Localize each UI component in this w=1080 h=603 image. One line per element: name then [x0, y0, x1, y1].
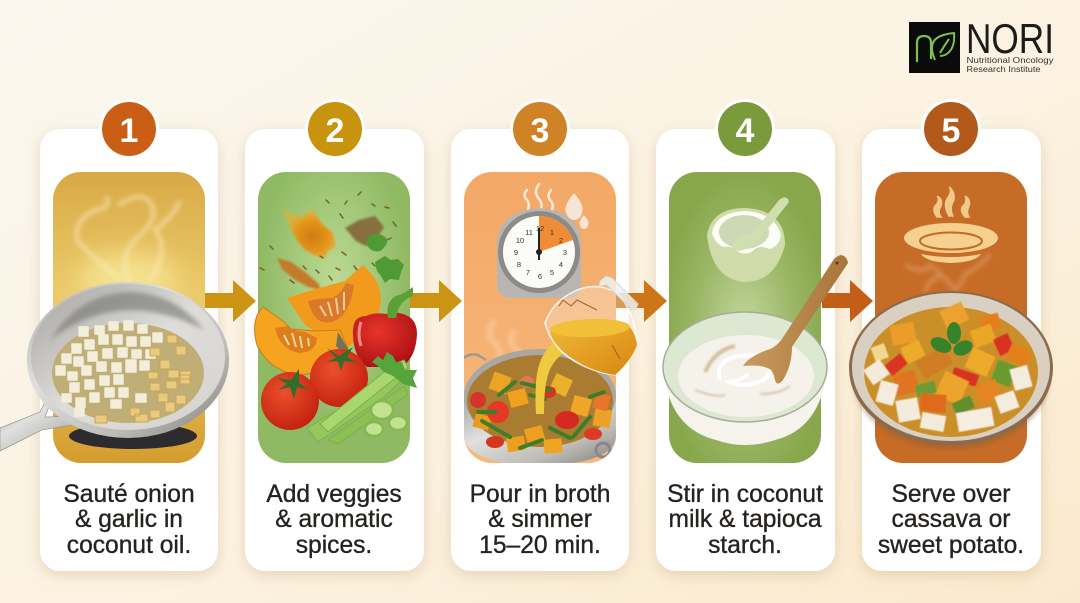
card 5	[862, 129, 1041, 571]
illustration: curry bowl	[849, 187, 1053, 449]
clock: 11	[525, 228, 533, 237]
caption 1: coconut oil.	[67, 532, 191, 559]
card 4	[656, 129, 835, 571]
caption 1: & garlic in	[75, 506, 183, 533]
pot	[464, 349, 616, 465]
badge 3	[510, 99, 570, 159]
clock: 3	[563, 248, 567, 257]
card 1	[40, 129, 218, 571]
pan	[27, 282, 229, 438]
coconut icon	[707, 197, 789, 282]
glass bowl	[663, 312, 827, 445]
arrow 2	[410, 280, 462, 322]
caption 4: Stir in coconut	[667, 481, 823, 508]
caption 4: starch.	[708, 532, 782, 559]
badge 4	[715, 99, 775, 159]
tomato 2	[310, 347, 368, 407]
pan handle	[0, 402, 78, 451]
cilantro	[366, 234, 404, 283]
caption 1	[63, 481, 195, 559]
rust spice	[277, 258, 320, 290]
steam icon	[934, 187, 970, 217]
steam above bowl	[905, 254, 990, 292]
caption 5: Serve over	[892, 481, 1010, 508]
clock: 9	[514, 248, 518, 257]
arrow 1	[205, 280, 256, 322]
caption 5: cassava or	[892, 506, 1010, 533]
logo: NORI: NORI	[966, 15, 1054, 62]
illustration: coconut milk bowl	[663, 197, 848, 445]
clock: 7	[526, 268, 530, 277]
caption 3: 15–20 min.	[479, 532, 601, 559]
clock: 12	[536, 224, 544, 233]
turmeric	[283, 209, 336, 259]
curry chunks	[863, 301, 1033, 432]
steam 1	[77, 196, 180, 304]
badge 1: 1	[120, 112, 138, 150]
cumin	[260, 192, 396, 285]
caption 3: & simmer	[488, 506, 592, 533]
logo: NORI: Nutritional Oncology	[966, 55, 1054, 65]
clock	[497, 208, 581, 298]
caption 2: Add veggies	[266, 481, 402, 508]
illustration: clock, pot and broth	[464, 184, 638, 465]
caption 5	[878, 481, 1024, 559]
card 3	[451, 129, 629, 571]
steam and water drops	[524, 184, 588, 229]
clock: 5	[550, 268, 554, 277]
stove steam	[489, 320, 519, 366]
badge 3: 3	[531, 112, 549, 150]
measuring cup	[545, 276, 638, 375]
badge 4: 4	[736, 112, 755, 150]
image panel 1	[53, 172, 205, 463]
caption 2	[266, 481, 402, 559]
caption 4	[667, 481, 823, 559]
illustration: vegetables and spices	[255, 192, 417, 444]
tomato 1	[261, 369, 319, 430]
caption 5: sweet potato.	[878, 532, 1024, 559]
badge 2: 2	[326, 112, 344, 150]
red pepper	[353, 287, 417, 367]
image panel 2	[258, 172, 410, 463]
badge 1	[99, 99, 159, 159]
illustration: sauté pan	[0, 196, 229, 451]
bowl body	[853, 307, 1049, 449]
caption 3: Pour in broth	[470, 481, 610, 508]
vegetables	[470, 371, 612, 454]
wooden spoon	[743, 255, 848, 384]
arrow 3	[616, 280, 667, 322]
clock: 6	[538, 272, 542, 281]
oil and onions	[52, 323, 204, 423]
clock: 2	[559, 236, 563, 245]
pumpkin front wedge	[255, 307, 351, 375]
logo: NORI	[909, 15, 1054, 74]
burner	[69, 423, 197, 449]
image panel 3	[464, 172, 616, 463]
broth stream	[536, 340, 569, 414]
plate icon	[904, 223, 998, 263]
image panel 5	[875, 172, 1027, 463]
caption 2: spices.	[296, 532, 372, 559]
caption 2: & aromatic	[275, 506, 393, 533]
caption 4: milk & tapioca	[668, 506, 822, 533]
clock: 8	[517, 260, 521, 269]
pumpkin back wedge	[287, 265, 381, 350]
clock: 4	[559, 260, 563, 269]
image panel 4	[669, 172, 821, 463]
badge 5	[921, 99, 981, 159]
arrow 4	[822, 280, 873, 322]
celery	[307, 352, 417, 444]
card 2	[245, 129, 424, 571]
badge 5: 5	[942, 112, 960, 150]
cilantro garnish	[928, 322, 975, 359]
caption 1: Sauté onion	[63, 481, 195, 508]
clock: 1	[550, 228, 554, 237]
logo: NORI: Research Institute	[966, 64, 1041, 74]
clock: 10	[516, 236, 524, 245]
caption 3	[470, 481, 610, 559]
badge 2	[305, 99, 365, 159]
